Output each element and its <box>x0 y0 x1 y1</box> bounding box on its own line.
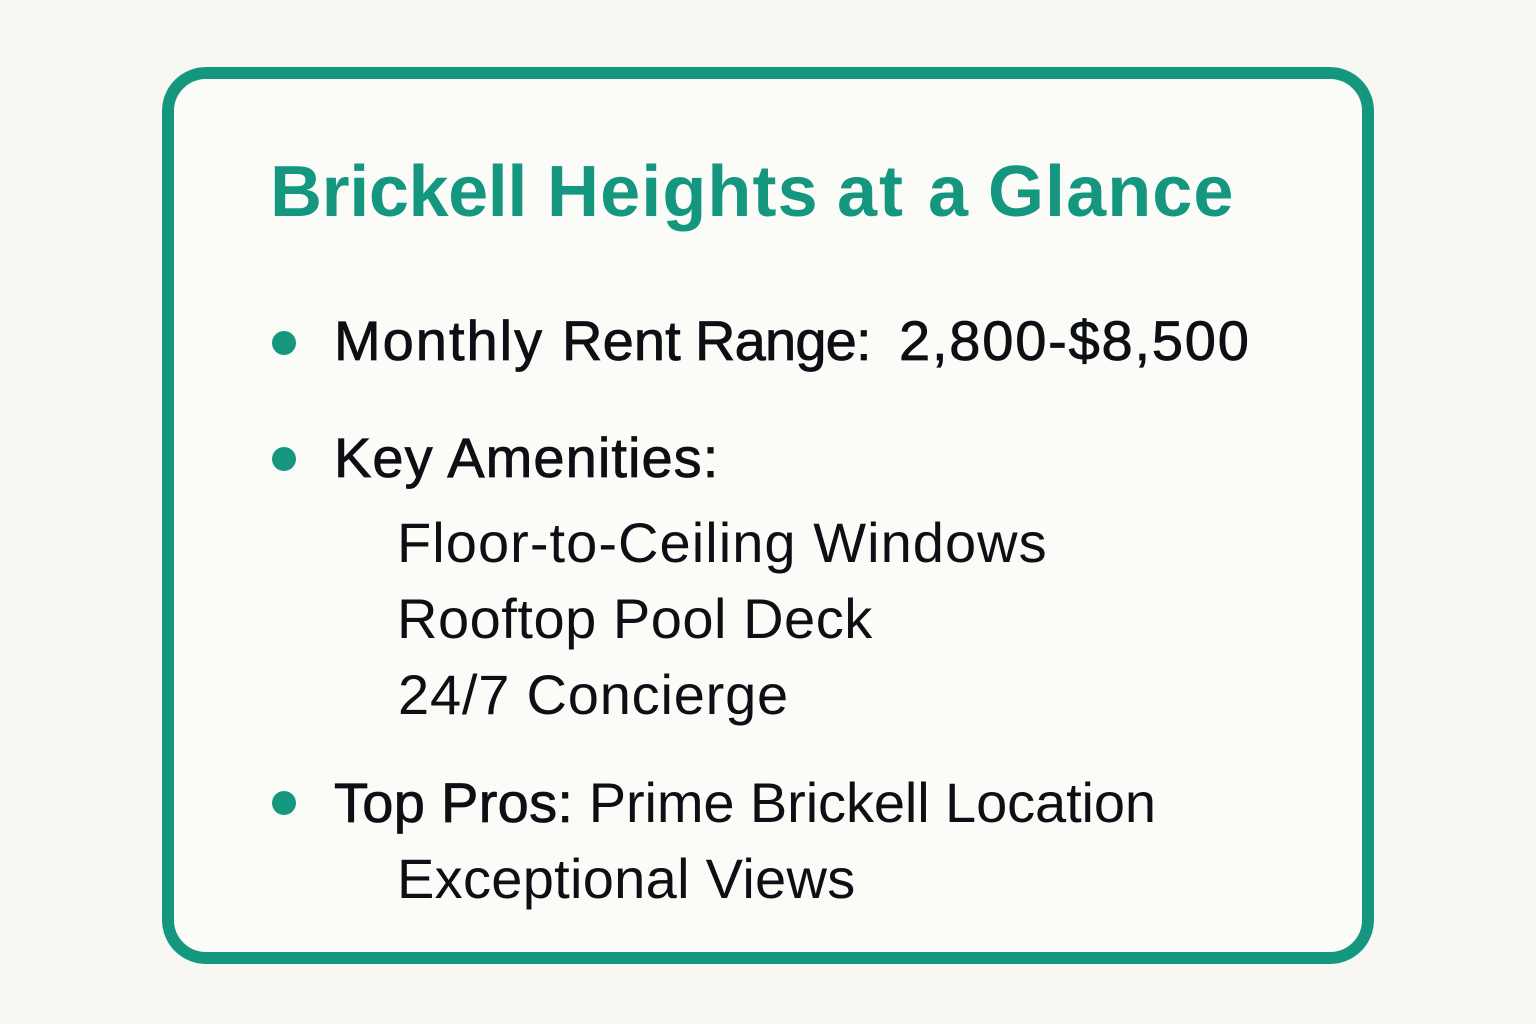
text: monthly rent range <box>334 309 1251 372</box>
title <box>270 152 1234 232</box>
text: concierge: 24/7 Concierge <box>398 663 789 726</box>
text: monthly rent range: Rent <box>562 309 681 372</box>
bullet icon: amenities <box>272 447 296 471</box>
text: floor-to-ceiling windows: Floor-to-Ceiling Windows <box>397 511 1048 574</box>
title: a <box>928 152 969 232</box>
text: exceptional views: Exceptional Views <box>397 847 856 910</box>
text: rooftop pool deck: Rooftop Pool Deck <box>397 587 873 650</box>
text: monthly rent range: 2,800-$8,500 <box>899 309 1251 372</box>
panel: card <box>162 67 1374 964</box>
text: top pros: Top Pros: Prime Brickell Location <box>334 771 1156 834</box>
text: monthly rent range: Monthly <box>334 309 544 372</box>
title: Brickell <box>270 152 527 232</box>
text: key amenities: Key Amenities: <box>334 426 719 489</box>
bullet icon: pros <box>272 791 296 815</box>
text: monthly rent range: Range: <box>695 309 871 372</box>
title: Heights <box>547 152 819 232</box>
title: Glance <box>988 152 1234 232</box>
bullet icon: rent <box>272 331 296 355</box>
title: at <box>837 152 905 232</box>
